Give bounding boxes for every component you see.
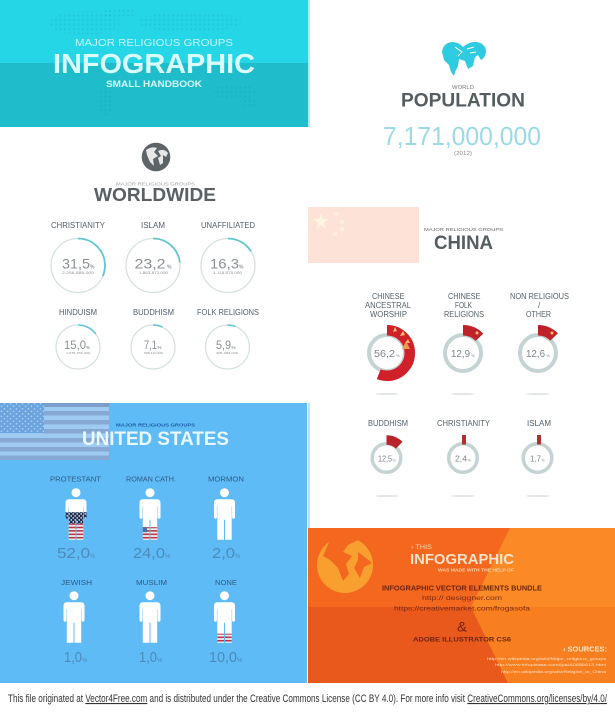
stat: muslim: MUSLIM [136, 578, 167, 587]
stat: china buddhism: % [392, 458, 396, 462]
ampersand: & [457, 618, 468, 634]
stat: china islam: % [542, 458, 545, 462]
stat: roman catholic [126, 474, 176, 562]
stat: china buddhism [368, 419, 408, 476]
flag banner [0, 403, 109, 460]
kicker: MAJOR RELIGIOUS GROUPS [116, 422, 195, 428]
stat: china christianity: % [468, 458, 471, 462]
stat: unaffiliated: % [239, 264, 244, 270]
stat: folk religions: FOLK RELIGIONS [197, 308, 259, 317]
stat: china buddhism: 12,5 [378, 454, 392, 464]
stat: protestant: 52,0 [57, 545, 90, 562]
stat: jewish: % [82, 658, 88, 664]
stat: non religious: / [538, 301, 541, 310]
stat: ancestral worship: % [396, 353, 400, 358]
stat: protestant: % [90, 554, 96, 560]
stat: islam: 23,2 [134, 256, 166, 272]
stat: unaffiliated [201, 221, 255, 292]
panel: worldwide [0, 127, 308, 403]
link 1: http:// desiggner.com [422, 595, 502, 602]
stat: hinduism: 15,0 [64, 340, 86, 352]
stat: folk religions: % [471, 353, 475, 358]
panel: header [0, 0, 308, 127]
header subtitle: SMALL HANDBOOK [106, 79, 202, 90]
source links: http://en.wikipedia.org/wiki/Religion_in_China [501, 669, 607, 674]
icon: orange globe [317, 536, 373, 593]
stat: buddhism [131, 308, 175, 369]
stat: muslim: 1,0 [139, 649, 157, 666]
stat: non religious: NON RELIGIOUS [510, 292, 569, 301]
stat: folk religions: FOLK [455, 301, 473, 310]
stat: islam: 1.863.872.000 [139, 271, 168, 275]
panel: china [308, 207, 615, 528]
stat: roman catholic: % [165, 554, 171, 560]
stat: ancestral worship: 56,2 [374, 349, 395, 360]
stat: ancestral worship: ANCESTRAL [365, 301, 412, 310]
stat: christianity: % [90, 264, 95, 270]
kicker: › THIS [411, 545, 432, 551]
stat: hinduism: 1.075.156.000 [66, 351, 90, 355]
stat: folk religions: % [232, 345, 236, 350]
stat: mormon: 2,0 [212, 545, 235, 562]
panel: united states [0, 403, 307, 683]
stat: protestant [50, 474, 101, 562]
sources heading: › SOURCES: [563, 646, 607, 654]
stat: buddhism: BUDDHISM [133, 308, 174, 317]
stat: folk religions [440, 292, 486, 376]
stat: christianity: 2.256.885.000 [62, 271, 94, 275]
subheading: WAS MADE WITH THE HELP OF [438, 568, 514, 572]
stat: islam [126, 221, 180, 292]
stat: muslim [136, 578, 167, 666]
stat: hinduism [56, 308, 100, 369]
stat: unaffiliated: UNAFFILIATED [201, 221, 255, 230]
stat: none [209, 578, 243, 666]
stat: roman catholic: 24,0 [133, 545, 165, 562]
shadows [375, 393, 550, 497]
stat: buddhism: 7,1 [144, 340, 157, 352]
stat: none: NONE [215, 578, 237, 587]
link 2: https://creativemarket.com/frogasofa [394, 606, 530, 612]
stat: jewish: 1,0 [64, 649, 82, 666]
stat: china islam: 1,7 [530, 454, 542, 464]
source links [487, 656, 607, 674]
stat: china christianity: CHRISTIANITY [437, 419, 491, 428]
panel: credits [308, 528, 615, 683]
stat: china islam [523, 419, 552, 472]
heading: CHINA [434, 233, 493, 254]
stat: mormon [208, 474, 244, 562]
flag banner [308, 207, 419, 263]
stat: folk religions: RELIGIONS [444, 310, 484, 319]
stat: folk religions [197, 308, 259, 369]
stat: islam: ISLAM [141, 221, 165, 230]
stat: protestant: PROTESTANT [50, 474, 101, 484]
stat: china christianity [437, 419, 491, 472]
stat: hinduism: HINDUISM [59, 308, 97, 317]
icon: heart globe [442, 42, 486, 76]
stat: christianity: CHRISTIANITY [51, 221, 106, 230]
panel: world population [308, 0, 615, 207]
heading: INFOGRAPHIC [410, 551, 514, 568]
icon: globe [142, 143, 170, 171]
stat: non religious: % [546, 353, 550, 358]
stat: ancestral worship: CHINESE [372, 292, 404, 301]
stat: christianity: 31,5 [62, 256, 90, 272]
stat: christianity [51, 221, 106, 292]
stat: mormon: MORMON [208, 474, 244, 484]
stat: jewish: JEWISH [61, 578, 92, 587]
stat: unaffiliated: 1.118.875.000 [213, 271, 242, 275]
stat: folk religions: 5,9 [216, 340, 231, 352]
stat: hinduism: % [86, 345, 90, 350]
source links: http://en.wikipedia.org/wiki/Major_religious_groups [487, 656, 606, 661]
stat: buddhism: % [158, 345, 162, 350]
stat: roman catholic: ROMAN CATH. [126, 474, 176, 484]
kicker: WORLD [452, 85, 474, 91]
stat: folk religions: 405.084.000 [216, 351, 238, 355]
stat: china christianity: 2,4 [455, 454, 468, 464]
stat: jewish [61, 578, 92, 666]
stat: none: 10,0 [209, 649, 237, 666]
bundle credit: INFOGRAPHIC VECTOR ELEMENTS BUNDLE [382, 586, 542, 592]
stat: china buddhism: BUDDHISM [368, 419, 408, 428]
stat: folk religions: 12,9 [451, 349, 470, 360]
world dot map [50, 9, 260, 116]
stat: non religious [510, 292, 569, 376]
stat: ancestral worship: WORSHIP [370, 310, 407, 319]
stat: islam: % [167, 264, 172, 270]
heading: UNITED STATES [82, 429, 229, 450]
population figure: 7,171,000,000 [383, 121, 541, 151]
stat: china islam: ISLAM [527, 419, 551, 428]
stat: folk religions: CHINESE [448, 292, 480, 301]
year: (2012) [454, 151, 472, 157]
stat: non religious: OTHER [526, 310, 551, 319]
stat: non religious: 12,6 [526, 349, 545, 360]
source links: http://www.infoplease.com/ipa/A0855613.html [495, 662, 606, 667]
heading: POPULATION [401, 90, 525, 112]
stat: mormon: % [235, 554, 241, 560]
kicker: MAJOR RELIGIOUS GROUPS [116, 182, 195, 186]
stat: none: % [237, 658, 243, 664]
header kicker: MAJOR RELIGIOUS GROUPS [75, 37, 233, 49]
heading: WORLDWIDE [94, 184, 216, 205]
header title: INFOGRAPHIC [53, 48, 255, 79]
stat: ancestral worship [364, 292, 412, 376]
illustrator credit: ADOBE ILLUSTRATOR CS6 [413, 636, 511, 644]
kicker: MAJOR RELIGIOUS GROUPS [424, 227, 503, 232]
stat: unaffiliated: 16,3 [210, 256, 239, 272]
stat: buddhism: 508.140.000 [144, 351, 163, 355]
stat: muslim: % [157, 658, 163, 664]
